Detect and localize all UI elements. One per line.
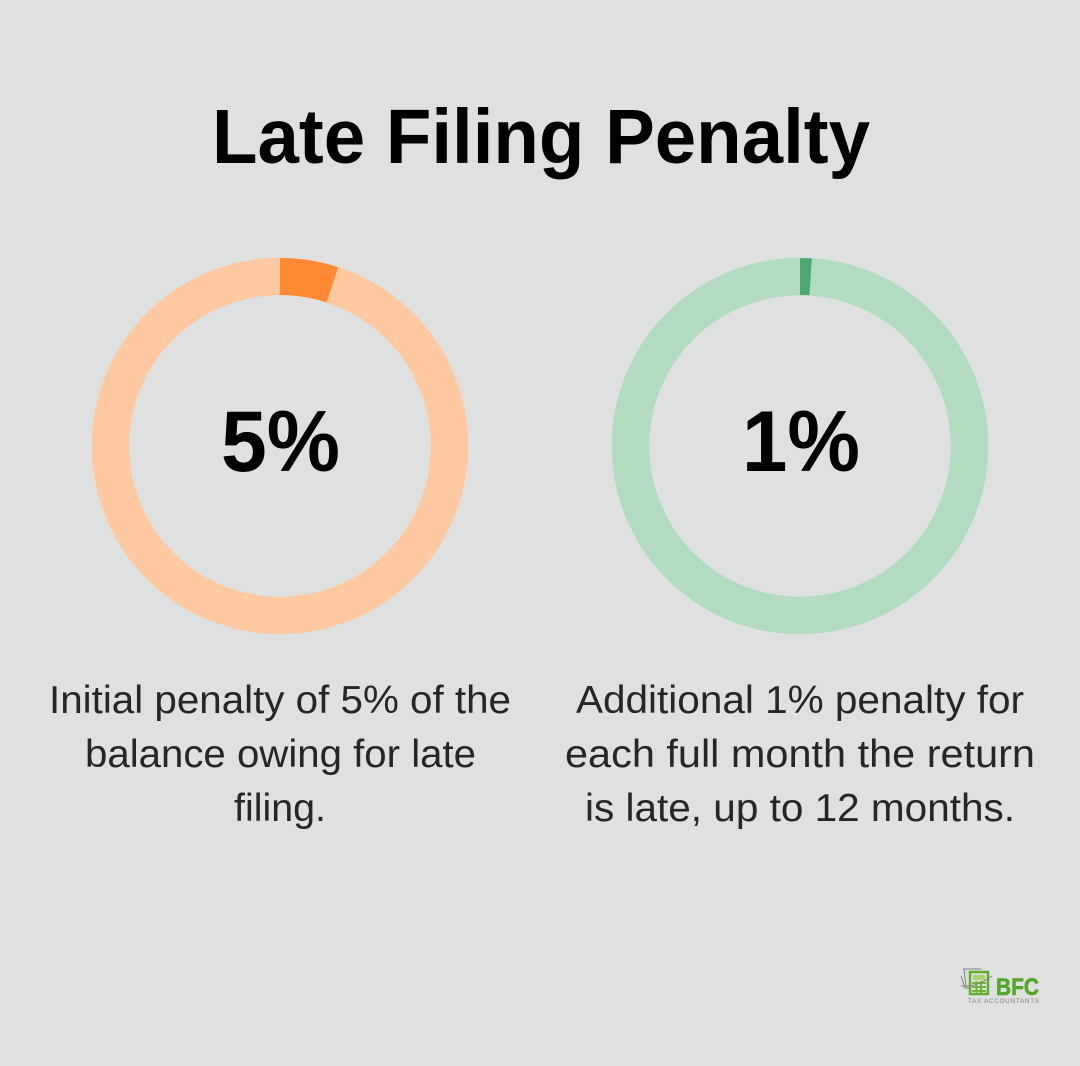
- description: initial penalty: balance owing for late: [85, 733, 476, 776]
- value: 1%: 1%: [742, 394, 860, 490]
- panel: 5% initial penalty: [49, 258, 511, 830]
- description: additional penalty: Additional 1% penalty for: [576, 679, 1024, 722]
- value: 5%: 5%: [221, 394, 340, 490]
- logo wordmark: BFC: [996, 974, 1039, 1001]
- description: initial penalty: Initial penalty of 5% of the: [49, 679, 511, 722]
- description: initial penalty: filing.: [234, 787, 326, 830]
- icon: calculator with papers: [961, 969, 992, 994]
- logo tagline: TAX ACCOUNTANTS: [968, 998, 1040, 1005]
- description: additional penalty: [565, 679, 1035, 830]
- title: Late Filing Penalty: [212, 94, 870, 180]
- panel: 1% additional penalty: [565, 258, 1035, 830]
- logo: BFC Tax Accountants: [961, 969, 1040, 1005]
- description: additional penalty: each full month the return: [565, 733, 1035, 776]
- donut chart: 5%: [110, 258, 450, 616]
- description: additional penalty: is late, up to 12 months.: [585, 787, 1015, 830]
- donut chart: 1%: [630, 258, 970, 616]
- description: initial penalty: [49, 679, 511, 830]
